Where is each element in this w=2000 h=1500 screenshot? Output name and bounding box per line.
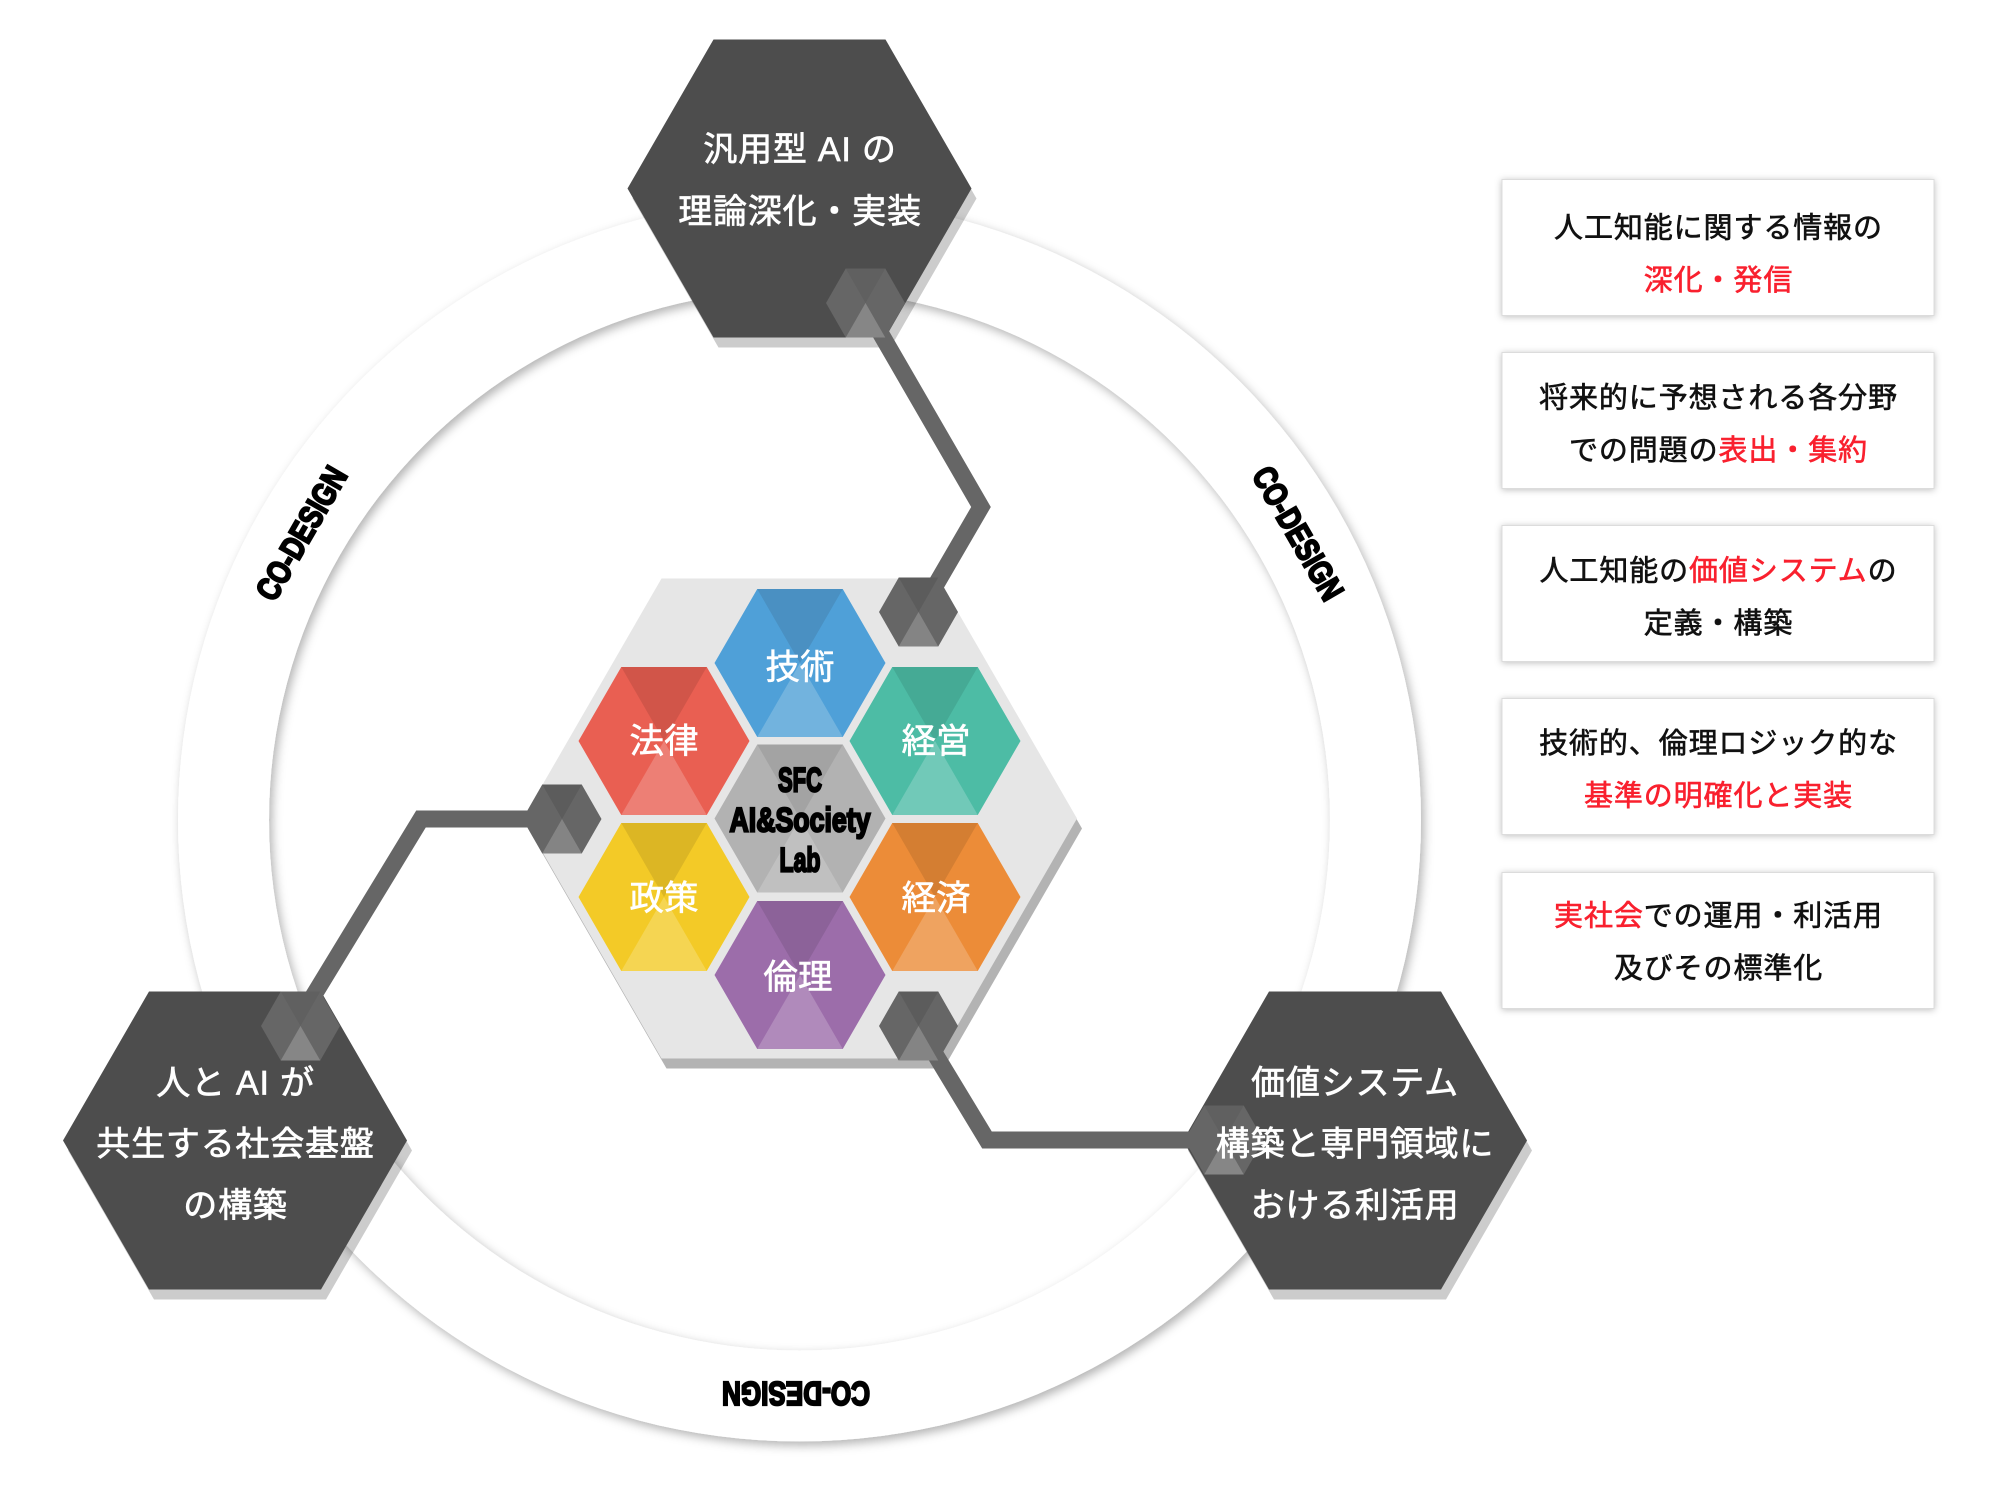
node: centre bottom bbox=[879, 992, 958, 1060]
callout: real-world use: 及びその標準化 bbox=[1614, 952, 1823, 985]
hexagon: general-purpose AI bbox=[628, 40, 976, 348]
hexagon: management: 経営 bbox=[902, 723, 970, 761]
label: CO-DESIGN left: CO-DESIGN bbox=[248, 460, 354, 607]
callout: define value systems: 定義・構築 bbox=[1644, 607, 1793, 640]
hexagon: policy bbox=[578, 823, 750, 971]
hexagon: technology: 技術 bbox=[766, 649, 834, 687]
callout: surface issues: 将来的に予想される各分野 bbox=[1539, 382, 1898, 414]
node: right hexagon bbox=[1184, 1106, 1264, 1174]
callout: define value systems bbox=[1502, 526, 1934, 662]
callout: surface issues bbox=[1502, 352, 1934, 488]
callout: deepen and share: 深化・発信 bbox=[1644, 264, 1793, 297]
heading: value systems: おける利活用 bbox=[1251, 1187, 1459, 1225]
heading: general-purpose AI: 汎用型 AI の bbox=[703, 131, 897, 169]
callout: clarify standards: 基準の明確化と実装 bbox=[1584, 780, 1853, 812]
heading: symbiotic society: の構築 bbox=[183, 1187, 288, 1225]
label: CO-DESIGN bottom: CO-DESIGN bbox=[722, 1375, 870, 1412]
callout: define value systems: 人工知能の価値システムの bbox=[1540, 556, 1897, 588]
hexagon: SFC AI&Society Lab: SFC bbox=[778, 762, 822, 800]
callout: clarify standards: 技術的、倫理ロジック的な bbox=[1539, 727, 1898, 760]
node: top hexagon bbox=[826, 268, 905, 338]
heading: symbiotic society: 共生する社会基盤 bbox=[96, 1126, 375, 1164]
hexagon: technology bbox=[714, 589, 886, 737]
heading: symbiotic society: 人と AI が bbox=[156, 1064, 315, 1102]
ring: co-design loop bbox=[178, 198, 1421, 1442]
heading: value systems: 構築と専門領域に bbox=[1216, 1126, 1494, 1164]
hexagon: SFC AI&Society Lab: Lab bbox=[780, 842, 820, 880]
central grey hexagon panel bbox=[523, 578, 1082, 1068]
hexagon: policy: 政策 bbox=[630, 880, 698, 918]
arrow: top connector bbox=[863, 303, 981, 612]
hexagon: ethics: 倫理 bbox=[764, 959, 832, 997]
hexagon: law bbox=[578, 667, 750, 815]
callout: surface issues: での問題の表出・集約 bbox=[1569, 435, 1868, 467]
hexagon: symbiotic society bbox=[63, 992, 412, 1300]
node: left hexagon bbox=[261, 992, 340, 1060]
hexagon: SFC AI&Society Lab bbox=[714, 744, 886, 892]
label: CO-DESIGN right: CO-DESIGN bbox=[1245, 460, 1351, 607]
arrow: right connector bbox=[918, 1026, 1224, 1140]
callout: real-world use bbox=[1502, 872, 1934, 1008]
node: centre top bbox=[879, 578, 958, 646]
hexagon: value systems bbox=[1183, 992, 1532, 1300]
arrow: left connector bbox=[295, 819, 563, 1026]
hexagon: law: 法律 bbox=[630, 723, 698, 761]
node: centre left bbox=[522, 784, 602, 854]
hexagon: ethics bbox=[714, 901, 886, 1049]
heading: general-purpose AI: 理論深化・実装 bbox=[678, 193, 922, 231]
hexagon: economy: 経済 bbox=[902, 880, 970, 918]
callout: deepen and share bbox=[1502, 180, 1934, 316]
heading: value systems: 価値システム bbox=[1251, 1064, 1459, 1102]
callout: clarify standards bbox=[1502, 698, 1934, 834]
hexagon: economy bbox=[850, 823, 1020, 971]
hexagon: management bbox=[850, 667, 1020, 815]
callout: real-world use: 実社会での運用・利活用 bbox=[1554, 900, 1883, 932]
callout: deepen and share: 人工知能に関する情報の bbox=[1554, 212, 1883, 244]
hexagon: SFC AI&Society Lab: AI&Society bbox=[730, 802, 871, 840]
